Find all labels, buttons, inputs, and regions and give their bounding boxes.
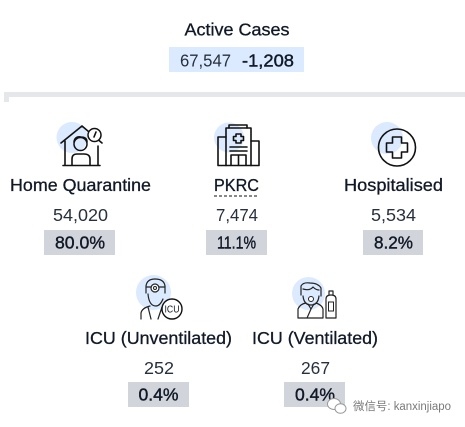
active cases figures: -1,208 xyxy=(242,50,294,70)
count: 54,020 xyxy=(53,205,108,225)
label: ICU (Unventilated) xyxy=(85,328,232,348)
title: Active Cases xyxy=(184,20,290,40)
label: Hospitalised xyxy=(344,175,443,195)
panel: hospitalised xyxy=(344,122,443,255)
panel: home quarantine xyxy=(10,122,151,255)
panel: ICU unventilated xyxy=(85,275,232,407)
icon: doctor with ICU badge xyxy=(136,275,182,319)
count: 5,534 xyxy=(371,205,416,225)
count: 252 xyxy=(144,358,174,378)
icon: house with person xyxy=(56,122,102,166)
label: Home Quarantine xyxy=(10,175,151,195)
panel: ICU ventilated xyxy=(252,277,378,407)
count: 267 xyxy=(301,358,330,378)
percentage: 80.0% xyxy=(55,232,105,252)
icon: medical cross xyxy=(371,122,416,166)
percentage xyxy=(44,230,115,255)
icon: chat bubbles xyxy=(328,398,346,413)
watermark xyxy=(328,398,451,413)
percentage: 11.1% xyxy=(217,232,256,252)
watermark: 微信号: kanxinjiapo xyxy=(353,399,451,413)
percentage: 8.2% xyxy=(374,232,413,252)
active cases figures xyxy=(169,47,304,72)
percentage xyxy=(128,382,189,407)
icon: hospital building xyxy=(214,122,259,166)
panel: PKRC xyxy=(206,122,267,255)
active cases figures: 67,547 xyxy=(180,50,231,70)
label: PKRC xyxy=(214,175,259,195)
count: 7,474 xyxy=(216,205,258,225)
percentage: 0.4% xyxy=(295,384,335,404)
percentage: 0.4% xyxy=(138,384,178,404)
icon: patient with oxygen tank xyxy=(292,277,336,318)
panel border xyxy=(4,92,465,102)
label: ICU (Ventilated) xyxy=(252,328,378,348)
icon: doctor with ICU badge: ICU xyxy=(164,304,180,316)
dashed underline xyxy=(214,195,259,197)
